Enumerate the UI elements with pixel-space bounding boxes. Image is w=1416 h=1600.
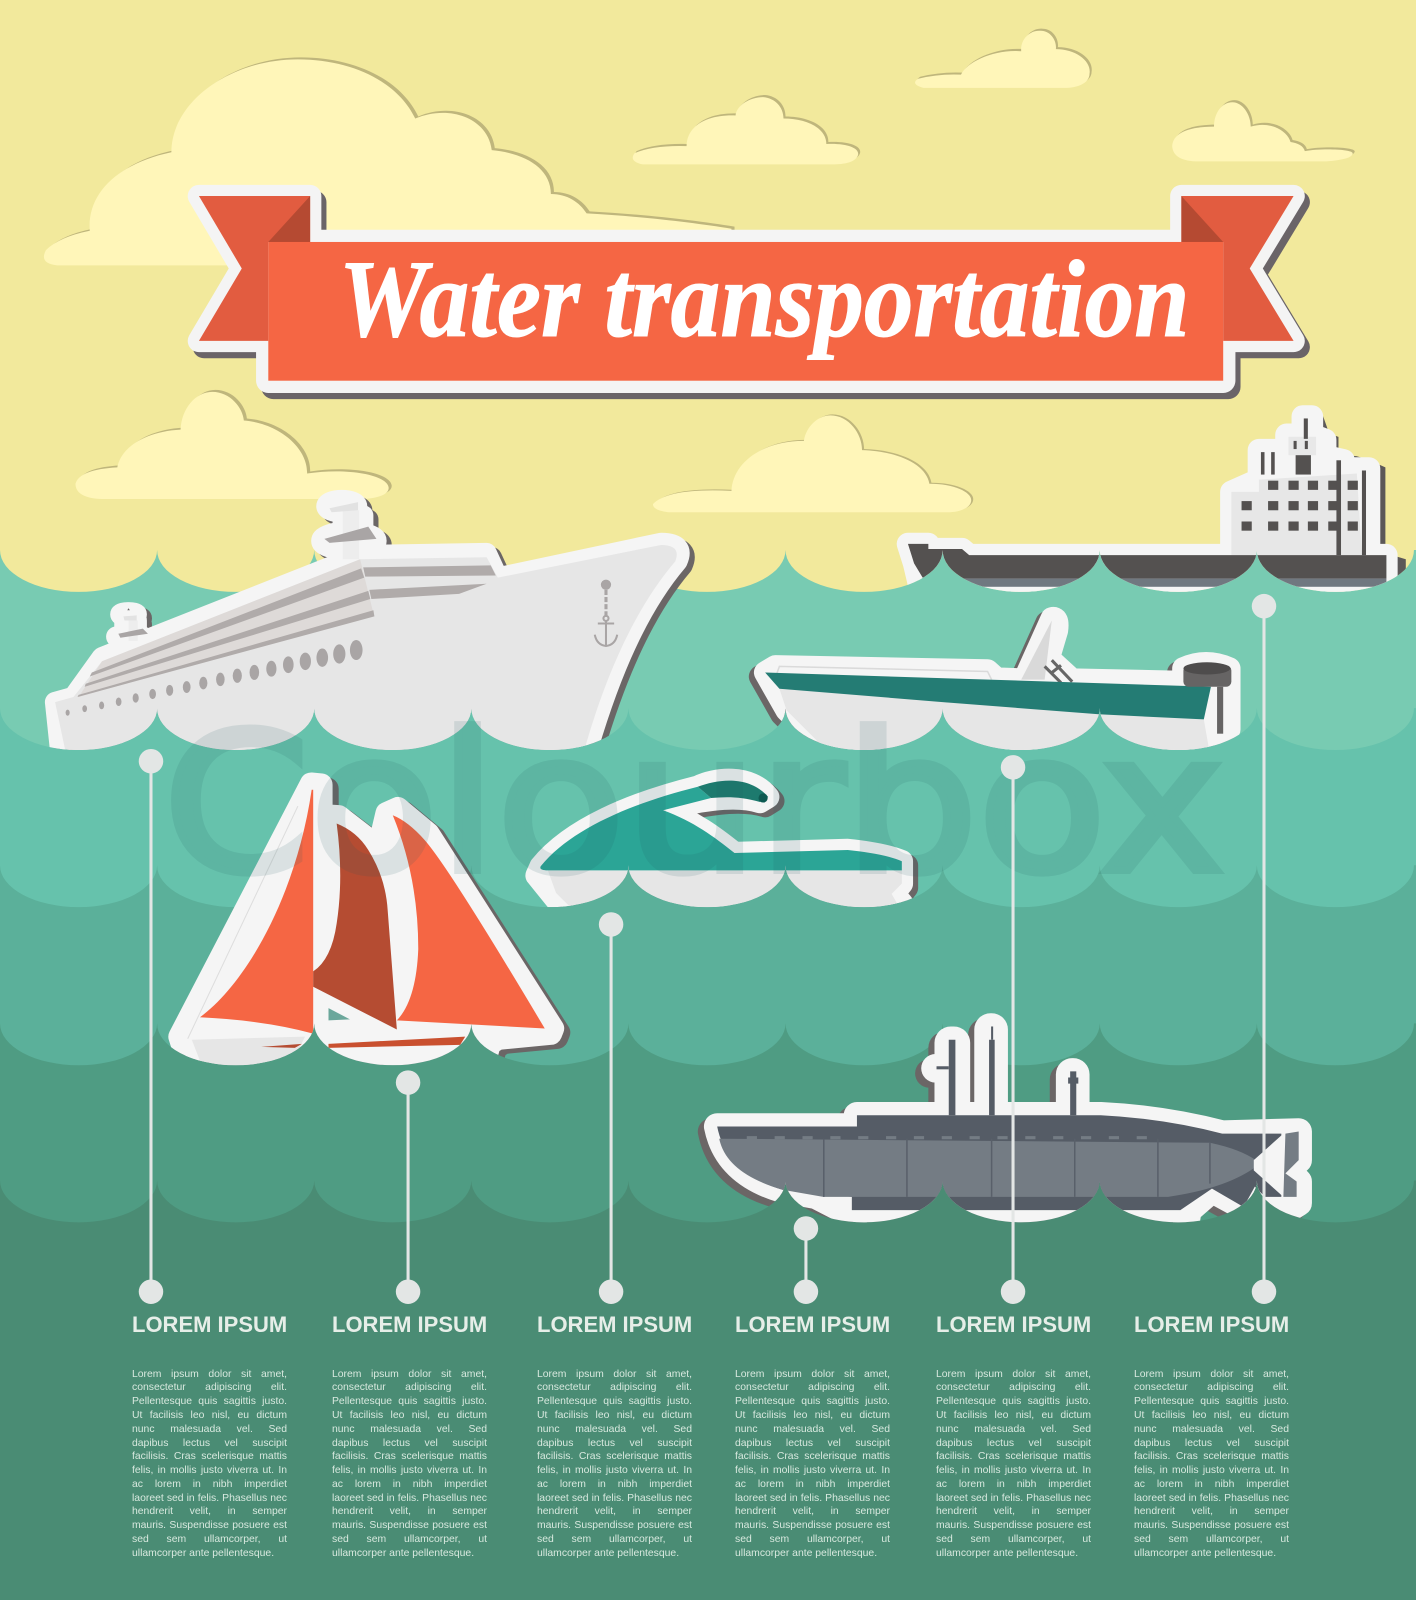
text: consectetur adipiscing elit. xyxy=(132,1382,287,1393)
text: nunc malesuada vel. Sed xyxy=(132,1424,287,1435)
text: mauris. Suspendisse posuere est xyxy=(735,1520,890,1531)
text: hendrerit velit, in semper xyxy=(735,1506,890,1517)
text: mauris. Suspendisse posuere est xyxy=(332,1520,487,1531)
text: Lorem ipsum dolor sit amet, xyxy=(537,1369,692,1380)
text column 1: LOREM IPSUM xyxy=(132,1312,287,1337)
text: Pellentesque quis sagittis justo. xyxy=(537,1396,692,1407)
rigging line xyxy=(188,806,298,1039)
text: hendrerit velit, in semper xyxy=(936,1506,1091,1517)
jet ski body xyxy=(540,787,902,870)
text: Ut facilisis leo nisl, eu dictum xyxy=(936,1410,1091,1421)
cruise ship xyxy=(55,500,685,764)
cargo hull waterline xyxy=(923,579,1386,587)
jet ski xyxy=(537,780,907,922)
text: ac lorem in nibh imperdiet xyxy=(332,1479,487,1490)
sailboat shadow xyxy=(186,788,559,1086)
cargo bridge panel xyxy=(1288,437,1316,455)
motor boat xyxy=(760,618,1231,764)
text: facilisis. Cras scelerisque mattis xyxy=(537,1451,692,1462)
text: hendrerit velit, in semper xyxy=(132,1506,287,1517)
boat deck line xyxy=(775,666,992,680)
text: dapibus lectus vel suscipit xyxy=(735,1438,890,1448)
submarine shadow xyxy=(711,1018,1293,1245)
right sail xyxy=(393,815,545,1029)
text column 1 xyxy=(132,1312,287,1559)
text: Ut facilisis leo nisl, eu dictum xyxy=(1134,1410,1289,1421)
text: laoreet sed in felis. Phasellus nec xyxy=(735,1493,890,1504)
text: Pellentesque quis sagittis justo. xyxy=(132,1396,287,1407)
cargo ship outline xyxy=(908,416,1386,602)
submarine outline xyxy=(717,1013,1299,1240)
text: dapibus lectus vel suscipit xyxy=(332,1438,487,1448)
handle grip xyxy=(758,793,768,803)
pin: motor boat xyxy=(1001,755,1025,1304)
text column 2 xyxy=(332,1312,487,1559)
text: facilisis. Cras scelerisque mattis xyxy=(132,1451,287,1462)
text: dapibus lectus vel suscipit xyxy=(1134,1438,1289,1448)
cruise ship shadow xyxy=(60,504,685,764)
jet ski shadow xyxy=(558,783,918,907)
text: laoreet sed in felis. Phasellus nec xyxy=(537,1493,692,1504)
hull battlements xyxy=(747,1136,1153,1139)
text: felis, in mollis justo viverra ut. In xyxy=(735,1465,890,1476)
cloud: top middle xyxy=(633,95,860,164)
cloud: top right upper xyxy=(915,29,1092,88)
pin: jet ski xyxy=(599,912,623,1304)
text: Ut facilisis leo nisl, eu dictum xyxy=(735,1410,890,1421)
text: sed sem ullamcorper, ut xyxy=(332,1534,487,1545)
text: sed sem ullamcorper, ut xyxy=(1134,1534,1289,1545)
text: Lorem ipsum dolor sit amet, xyxy=(332,1369,487,1380)
cloud: lower left xyxy=(75,390,392,499)
text: dapibus lectus vel suscipit xyxy=(936,1438,1091,1448)
text column 6 xyxy=(1134,1312,1289,1559)
cruise ship outline xyxy=(55,500,679,760)
text: nunc malesuada vel. Sed xyxy=(537,1424,692,1435)
motor boat outline xyxy=(765,618,1229,760)
jet ski handlebar xyxy=(698,781,768,802)
text: ullamcorper ante pellentesque. xyxy=(735,1548,877,1559)
icon: anchor xyxy=(595,580,617,646)
text: laoreet sed in felis. Phasellus nec xyxy=(132,1493,287,1504)
ribbon left fold xyxy=(268,196,310,242)
text: facilisis. Cras scelerisque mattis xyxy=(1134,1451,1289,1462)
text: Pellentesque quis sagittis justo. xyxy=(936,1396,1091,1407)
text: Pellentesque quis sagittis justo. xyxy=(332,1396,487,1407)
text: ac lorem in nibh imperdiet xyxy=(936,1479,1091,1490)
text: nunc malesuada vel. Sed xyxy=(1134,1424,1289,1435)
text: consectetur adipiscing elit. xyxy=(1134,1382,1289,1393)
text: felis, in mollis justo viverra ut. In xyxy=(132,1465,287,1476)
text: felis, in mollis justo viverra ut. In xyxy=(332,1465,487,1476)
text: consectetur adipiscing elit. xyxy=(332,1382,487,1393)
cargo hull xyxy=(908,544,1386,579)
submarine dark hull xyxy=(717,1115,1281,1210)
pin: sailboat xyxy=(396,1070,420,1304)
title: Water transportation xyxy=(339,238,1190,360)
text: Lorem ipsum dolor sit amet, xyxy=(735,1369,890,1380)
hull red streak xyxy=(328,1037,465,1048)
cargo ship shadow xyxy=(1323,416,1406,576)
text: nunc malesuada vel. Sed xyxy=(735,1424,890,1435)
text column 4: LOREM IPSUM xyxy=(735,1312,890,1337)
text: dapibus lectus vel suscipit xyxy=(537,1438,692,1448)
text: Ut facilisis leo nisl, eu dictum xyxy=(132,1410,287,1421)
motor boat shadow xyxy=(760,622,1224,764)
text: laoreet sed in felis. Phasellus nec xyxy=(936,1493,1091,1504)
sailboat xyxy=(180,784,559,1086)
hull segment lines xyxy=(824,1139,1210,1197)
text: facilisis. Cras scelerisque mattis xyxy=(936,1451,1091,1462)
text: ac lorem in nibh imperdiet xyxy=(537,1479,692,1490)
text: ullamcorper ante pellentesque. xyxy=(537,1548,679,1559)
text: sed sem ullamcorper, ut xyxy=(537,1534,692,1545)
tail fin gray xyxy=(1283,1132,1299,1197)
text column 5: LOREM IPSUM xyxy=(936,1312,1091,1337)
text: Lorem ipsum dolor sit amet, xyxy=(132,1369,287,1380)
jet ski outline xyxy=(537,780,902,918)
text: felis, in mollis justo viverra ut. In xyxy=(936,1465,1091,1476)
connector pins xyxy=(139,594,1276,1304)
text: dapibus lectus vel suscipit xyxy=(132,1438,287,1448)
text: hendrerit velit, in semper xyxy=(537,1506,692,1517)
boat windshield xyxy=(1021,620,1052,680)
boat seat rails xyxy=(1045,660,1072,683)
small funnel xyxy=(118,616,148,638)
cruise hull xyxy=(55,545,677,760)
text: nunc malesuada vel. Sed xyxy=(332,1424,487,1435)
text: ullamcorper ante pellentesque. xyxy=(332,1548,474,1559)
submarine xyxy=(711,1013,1299,1245)
watermark: Colourbox: Colourbox xyxy=(163,693,1224,916)
portholes xyxy=(66,640,363,716)
text: Lorem ipsum dolor sit amet, xyxy=(1134,1369,1289,1380)
text: nunc malesuada vel. Sed xyxy=(936,1424,1091,1435)
text column 3: LOREM IPSUM xyxy=(537,1312,692,1337)
banner ribbon with title xyxy=(199,196,1299,387)
jet ski lower hull xyxy=(548,870,902,907)
cloud: top right xyxy=(1172,100,1355,161)
left sail xyxy=(200,790,313,1034)
text: ac lorem in nibh imperdiet xyxy=(735,1479,890,1490)
text: mauris. Suspendisse posuere est xyxy=(1134,1520,1289,1531)
ribbon left tail xyxy=(199,196,310,341)
outboard motor xyxy=(1183,662,1231,734)
submarine light body xyxy=(719,1139,1256,1197)
large funnel xyxy=(324,502,376,543)
text: laoreet sed in felis. Phasellus nec xyxy=(1134,1493,1289,1504)
ribbon right fold xyxy=(1181,196,1223,242)
text: ac lorem in nibh imperdiet xyxy=(1134,1479,1289,1490)
text: felis, in mollis justo viverra ut. In xyxy=(1134,1465,1289,1476)
text column 5 xyxy=(936,1312,1091,1559)
text: hendrerit velit, in semper xyxy=(1134,1506,1289,1517)
text: Ut facilisis leo nisl, eu dictum xyxy=(332,1410,487,1421)
text: consectetur adipiscing elit. xyxy=(735,1382,890,1393)
text: mauris. Suspendisse posuere est xyxy=(537,1520,692,1531)
text: sed sem ullamcorper, ut xyxy=(936,1534,1091,1545)
rigging window xyxy=(328,1008,350,1020)
text: consectetur adipiscing elit. xyxy=(537,1382,692,1393)
sailboat hull shade xyxy=(192,1036,305,1066)
text: mauris. Suspendisse posuere est xyxy=(132,1520,287,1531)
text: Pellentesque quis sagittis justo. xyxy=(1134,1396,1289,1407)
cloud: large left xyxy=(44,57,735,265)
cruise deck stripes xyxy=(78,565,496,697)
text: facilisis. Cras scelerisque mattis xyxy=(332,1451,487,1462)
cargo ship xyxy=(908,406,1406,602)
text: ullamcorper ante pellentesque. xyxy=(936,1548,1078,1559)
text: consectetur adipiscing elit. xyxy=(936,1382,1091,1393)
cruise deck band xyxy=(79,559,373,697)
text: sed sem ullamcorper, ut xyxy=(735,1534,890,1545)
text column 3 xyxy=(537,1312,692,1559)
clouds xyxy=(44,29,1355,512)
cloud: lower middle xyxy=(653,414,973,512)
text: Pellentesque quis sagittis justo. xyxy=(735,1396,890,1407)
text: felis, in mollis justo viverra ut. In xyxy=(537,1465,692,1476)
banner white border xyxy=(199,196,1294,381)
text column 6: LOREM IPSUM xyxy=(1134,1312,1289,1337)
text: ullamcorper ante pellentesque. xyxy=(1134,1548,1276,1559)
pin: submarine xyxy=(794,1216,818,1304)
pin: cruise ship xyxy=(139,749,163,1304)
cargo windows and masts xyxy=(1242,418,1366,555)
text: mauris. Suspendisse posuere est xyxy=(936,1520,1091,1531)
text: Ut facilisis leo nisl, eu dictum xyxy=(537,1410,692,1421)
text: facilisis. Cras scelerisque mattis xyxy=(735,1451,890,1462)
ribbon main band xyxy=(268,242,1223,381)
pin: cargo ship xyxy=(1252,594,1276,1304)
text: ac lorem in nibh imperdiet xyxy=(132,1479,287,1490)
text column 2: LOREM IPSUM xyxy=(332,1312,487,1337)
ribbon right tail xyxy=(1181,196,1294,341)
boat hull xyxy=(780,689,1208,750)
text: hendrerit velit, in semper xyxy=(332,1506,487,1517)
periscopes xyxy=(937,1026,1078,1115)
tail fin white xyxy=(1254,1134,1283,1197)
boat teal stripe xyxy=(765,672,1211,719)
hull dark streak xyxy=(261,1044,302,1048)
text: Lorem ipsum dolor sit amet, xyxy=(936,1369,1091,1380)
middle sail xyxy=(313,823,397,1030)
banner shadow xyxy=(204,202,1299,387)
sailboat outline xyxy=(180,784,553,1082)
text: ullamcorper ante pellentesque. xyxy=(132,1548,274,1559)
text column 4 xyxy=(735,1312,890,1559)
text: sed sem ullamcorper, ut xyxy=(132,1534,287,1545)
text: laoreet sed in felis. Phasellus nec xyxy=(332,1493,487,1504)
cargo superstructure lower block xyxy=(1231,474,1362,555)
